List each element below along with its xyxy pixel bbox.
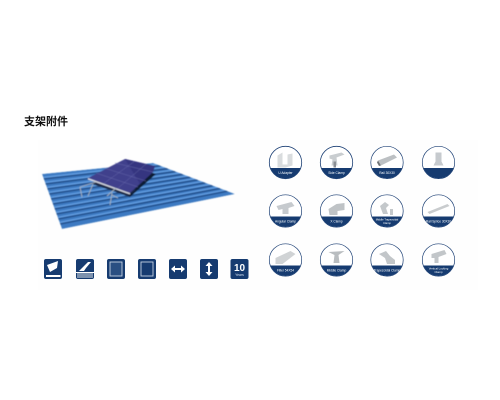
icon: panel outline [138,259,156,279]
badge: X Clamp [320,195,354,228]
badge: unlabeled bracket [422,146,456,180]
background panel [38,140,478,290]
badge: Rail Splice 30X30 [422,195,456,228]
icon: tilt mount [76,259,94,279]
corrugated roof [42,163,235,229]
accessory badges grid [268,146,456,278]
badge: Middle Clamp: Middle Clamp [327,268,346,272]
badge: Trapezoidal Clamp [370,244,404,278]
roof with solar panel [42,159,235,229]
badge: Trapezoidal Clamp: Trapezoidal Clamp [374,268,401,272]
badge: Angular Clamp: Angular Clamp [275,220,296,224]
solar panel [88,159,155,193]
panel shadow [94,172,156,197]
icon: 10 years: 10 [234,263,245,274]
badge: Rail 30x30 [370,146,404,180]
mounting brackets [80,182,118,205]
title: 支架附件 [24,114,68,128]
badge: Angular Clamp [268,195,302,228]
icon: vertical arrow [200,259,218,279]
badge: Middle Trapezoidal Clamp: Middle Trapezoidal [376,218,399,222]
badge: U Adapter [268,146,302,180]
badge: Vertical Locking Clamp: Vertical Locking [429,266,449,270]
badge: Vertical Locking Clamp: Clamp [434,270,443,274]
badge: X Clamp: X Clamp [330,220,343,224]
badge: Side Clamp [320,146,354,180]
badge: Vertical Locking Clamp [422,244,456,278]
badge: Middle Trapezoidal Clamp [370,195,404,228]
icon: roof sheet [44,259,62,279]
badge: Middle Trapezoidal Clamp: Clamp [383,221,391,225]
badge: Filler 54x54: Filler 54X54 [277,268,294,272]
badge: Side Clamp: Side Clamp [328,171,345,175]
icon: 10 years [230,259,248,279]
feature icons row [44,259,248,279]
badge: U Adapter: U Adapter [278,171,294,175]
badge: Rail Splice 30X30: Rail Splice 30X30 [426,220,451,224]
badge: Middle Clamp [320,244,354,278]
icon: panel frame [107,259,125,279]
icon: 10 years: Years [235,273,244,277]
badge: Filler 54x54 [268,244,302,278]
icon: horizontal arrow [169,259,187,279]
badge: Rail 30x30: Rail 30X30 [379,171,395,175]
